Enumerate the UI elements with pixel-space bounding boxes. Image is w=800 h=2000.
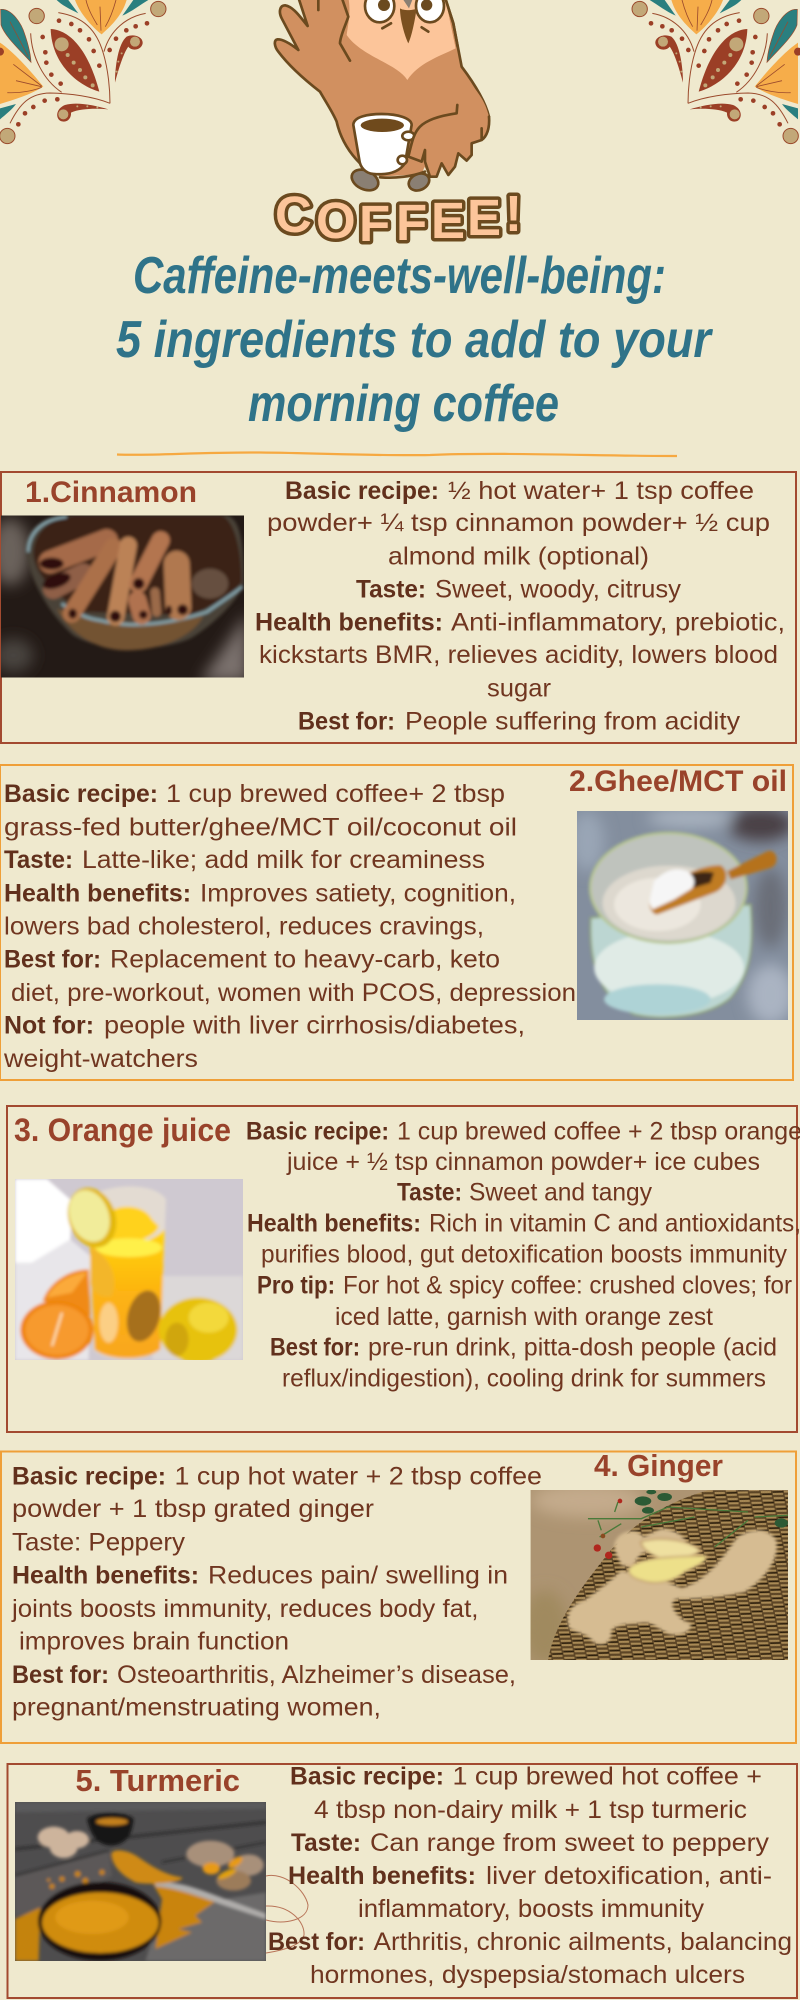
recipe text: ginger: 1 cup hot water + 2 tbsp coffee (174, 1462, 542, 1490)
recipe text: cinnamon: ½ hot water+ 1 tsp coffee (448, 477, 754, 505)
recipe text: orange juice: 1 cup brewed coffee + 2 tbsp orange (397, 1118, 800, 1146)
logo: COFFEE! lettering: COFFEE! (275, 185, 522, 252)
recipe text: turmeric: 1 cup brewed hot coffee + (452, 1762, 762, 1790)
recipe text: ghee: Latte-like; add milk for creaminess (82, 846, 485, 874)
recipe text: ghee: Best for: (4, 946, 101, 974)
recipe text: orange juice: reflux/indigestion), cooling drink for summers (282, 1364, 766, 1392)
recipe text: cinnamon: kickstarts BMR, relieves acidity, lowers blood (259, 641, 778, 669)
recipe text: orange juice: Taste: (397, 1178, 462, 1206)
heading: cinnamon: 1.Cinnamon (25, 476, 197, 509)
recipe text: ginger: Osteoarthritis, Alzheimer’s disease, (117, 1661, 516, 1689)
photo: ginger root on woven mat (530, 1490, 788, 1660)
recipe text: cinnamon: sugar (487, 674, 551, 702)
recipe text: ginger: pregnant/menstruating women, (12, 1694, 381, 1722)
recipe text: orange juice: Best for: (270, 1334, 360, 1362)
recipe text: orange juice: Health benefits: (247, 1210, 421, 1238)
heading: orange juice: 3. Orange juice (14, 1112, 231, 1148)
photo: turmeric powder, spoon and roots (15, 1802, 266, 1961)
recipe text: turmeric: Best for: (268, 1928, 365, 1956)
photo: jar of ghee with scoop (577, 811, 788, 1020)
recipe text: turmeric: Taste: (291, 1829, 361, 1857)
recipe text: turmeric: Basic recipe: (290, 1762, 444, 1790)
recipe text: turmeric: hormones, dyspepsia/stomach ulcers (310, 1961, 745, 1989)
recipe text: cinnamon: Anti-inflammatory, prebiotic, (451, 608, 785, 636)
heading: turmeric: 5. Turmeric (76, 1763, 240, 1798)
recipe text: turmeric: inflammatory, boosts immunity (358, 1895, 705, 1923)
recipe text: orange juice: Basic recipe: (246, 1118, 389, 1146)
heading: ghee: 2.Ghee/MCT oil (569, 765, 787, 798)
recipe text: orange juice: purifies blood, gut detoxification boosts immunity (261, 1240, 787, 1268)
recipe text: ginger: Basic recipe: (12, 1462, 166, 1490)
ornament: top right mandala (632, 0, 800, 144)
coffee cup (353, 114, 414, 174)
recipe text: ghee: lowers bad cholesterol, reduces cravings, (4, 912, 484, 940)
recipe text: ghee: 1 cup brewed coffee+ 2 tbsp (166, 780, 505, 808)
recipe text: cinnamon: powder+ ¼ tsp cinnamon powder+ ½ cup (267, 509, 770, 537)
recipe text: ginger: improves brain function (19, 1628, 289, 1656)
recipe text: turmeric: Health benefits: (288, 1862, 476, 1890)
recipe text: cinnamon: Sweet, woody, citrusy (435, 576, 682, 604)
title: morning coffee (248, 375, 559, 433)
recipe text: orange juice: Pro tip: (257, 1272, 335, 1300)
recipe text: ghee: Health benefits: (4, 880, 191, 908)
recipe text: ginger: Taste: Peppery (12, 1528, 186, 1556)
panel: 1 cinnamon (0, 472, 796, 743)
recipe text: cinnamon: Health benefits: (255, 608, 443, 636)
recipe text: turmeric: liver detoxification, anti- (486, 1862, 772, 1890)
recipe text: ghee: Replacement to heavy-carb, keto (110, 946, 500, 974)
recipe text: cinnamon (255, 477, 785, 736)
recipe text: orange juice: juice + ½ tsp cinnamon powder+ ice cubes (286, 1148, 760, 1176)
recipe text: ginger: Reduces pain/ swelling in (208, 1562, 508, 1590)
recipe text: ginger: Health benefits: (12, 1562, 199, 1590)
recipe text: orange juice (246, 1118, 800, 1392)
recipe text: turmeric: 4 tbsp non-dairy milk + 1 tsp turmeric (314, 1796, 747, 1824)
photo: cinnamon sticks in bowl (1, 516, 244, 678)
panel: 3 orange juice (7, 1106, 800, 1432)
recipe text: ginger: Best for: (12, 1661, 109, 1689)
recipe text: cinnamon: People suffering from acidity (405, 708, 741, 736)
recipe text: ghee: people with liver cirrhosis/diabetes, (104, 1012, 525, 1040)
recipe text: orange juice: pre-run drink, pitta-dosh people (acid (368, 1334, 777, 1362)
recipe text: orange juice: Sweet and tangy (469, 1178, 652, 1206)
panel: 5 turmeric (8, 1762, 797, 1998)
panel: 4 ginger (1, 1448, 796, 1743)
title: 5 ingredients to add to your (116, 311, 713, 369)
recipe text: turmeric: Arthritis, chronic ailments, balancing (374, 1928, 792, 1956)
recipe text: ginger: powder + 1 tbsp grated ginger (12, 1495, 374, 1523)
recipe text: ghee: Improves satiety, cognition, (200, 880, 516, 908)
illustration: owl holding coffee cup (275, 0, 489, 194)
recipe text: ginger: joints boosts immunity, reduces body fat, (11, 1595, 478, 1623)
title (116, 247, 713, 433)
recipe text: ginger (11, 1462, 542, 1722)
recipe text: cinnamon: almond milk (optional) (388, 542, 649, 570)
recipe text: ghee: weight-watchers (3, 1045, 198, 1073)
heading: ginger: 4. Ginger (594, 1448, 723, 1483)
recipe text: ghee: Not for: (4, 1012, 94, 1040)
recipe text: orange juice: For hot & spicy coffee: crushed cloves; for (343, 1272, 792, 1300)
recipe text: cinnamon: Basic recipe: (285, 477, 439, 505)
title: Caffeine-meets-well-being: (133, 247, 666, 305)
recipe text: ghee: Basic recipe: (4, 780, 158, 808)
recipe text: ghee: grass-fed butter/ghee/MCT oil/coconut oil (4, 814, 517, 842)
recipe text: orange juice: iced latte, garnish with orange zest (335, 1303, 713, 1331)
ornament: top left mandala (0, 0, 166, 144)
recipe text: ghee: diet, pre-workout, women with PCOS, depression (11, 979, 576, 1007)
recipe text: cinnamon: Taste: (356, 576, 426, 604)
recipe text: cinnamon: Best for: (298, 708, 395, 736)
owl eyes (365, 0, 444, 22)
recipe text: ghee (3, 780, 576, 1073)
panel: 2 ghee / MCT oil (0, 765, 794, 1080)
recipe text: turmeric (268, 1762, 792, 1989)
recipe text: turmeric: Can range from sweet to peppery (370, 1829, 770, 1857)
recipe text: ghee: Taste: (4, 846, 73, 874)
photo: glass of orange juice with citrus (15, 1179, 243, 1360)
